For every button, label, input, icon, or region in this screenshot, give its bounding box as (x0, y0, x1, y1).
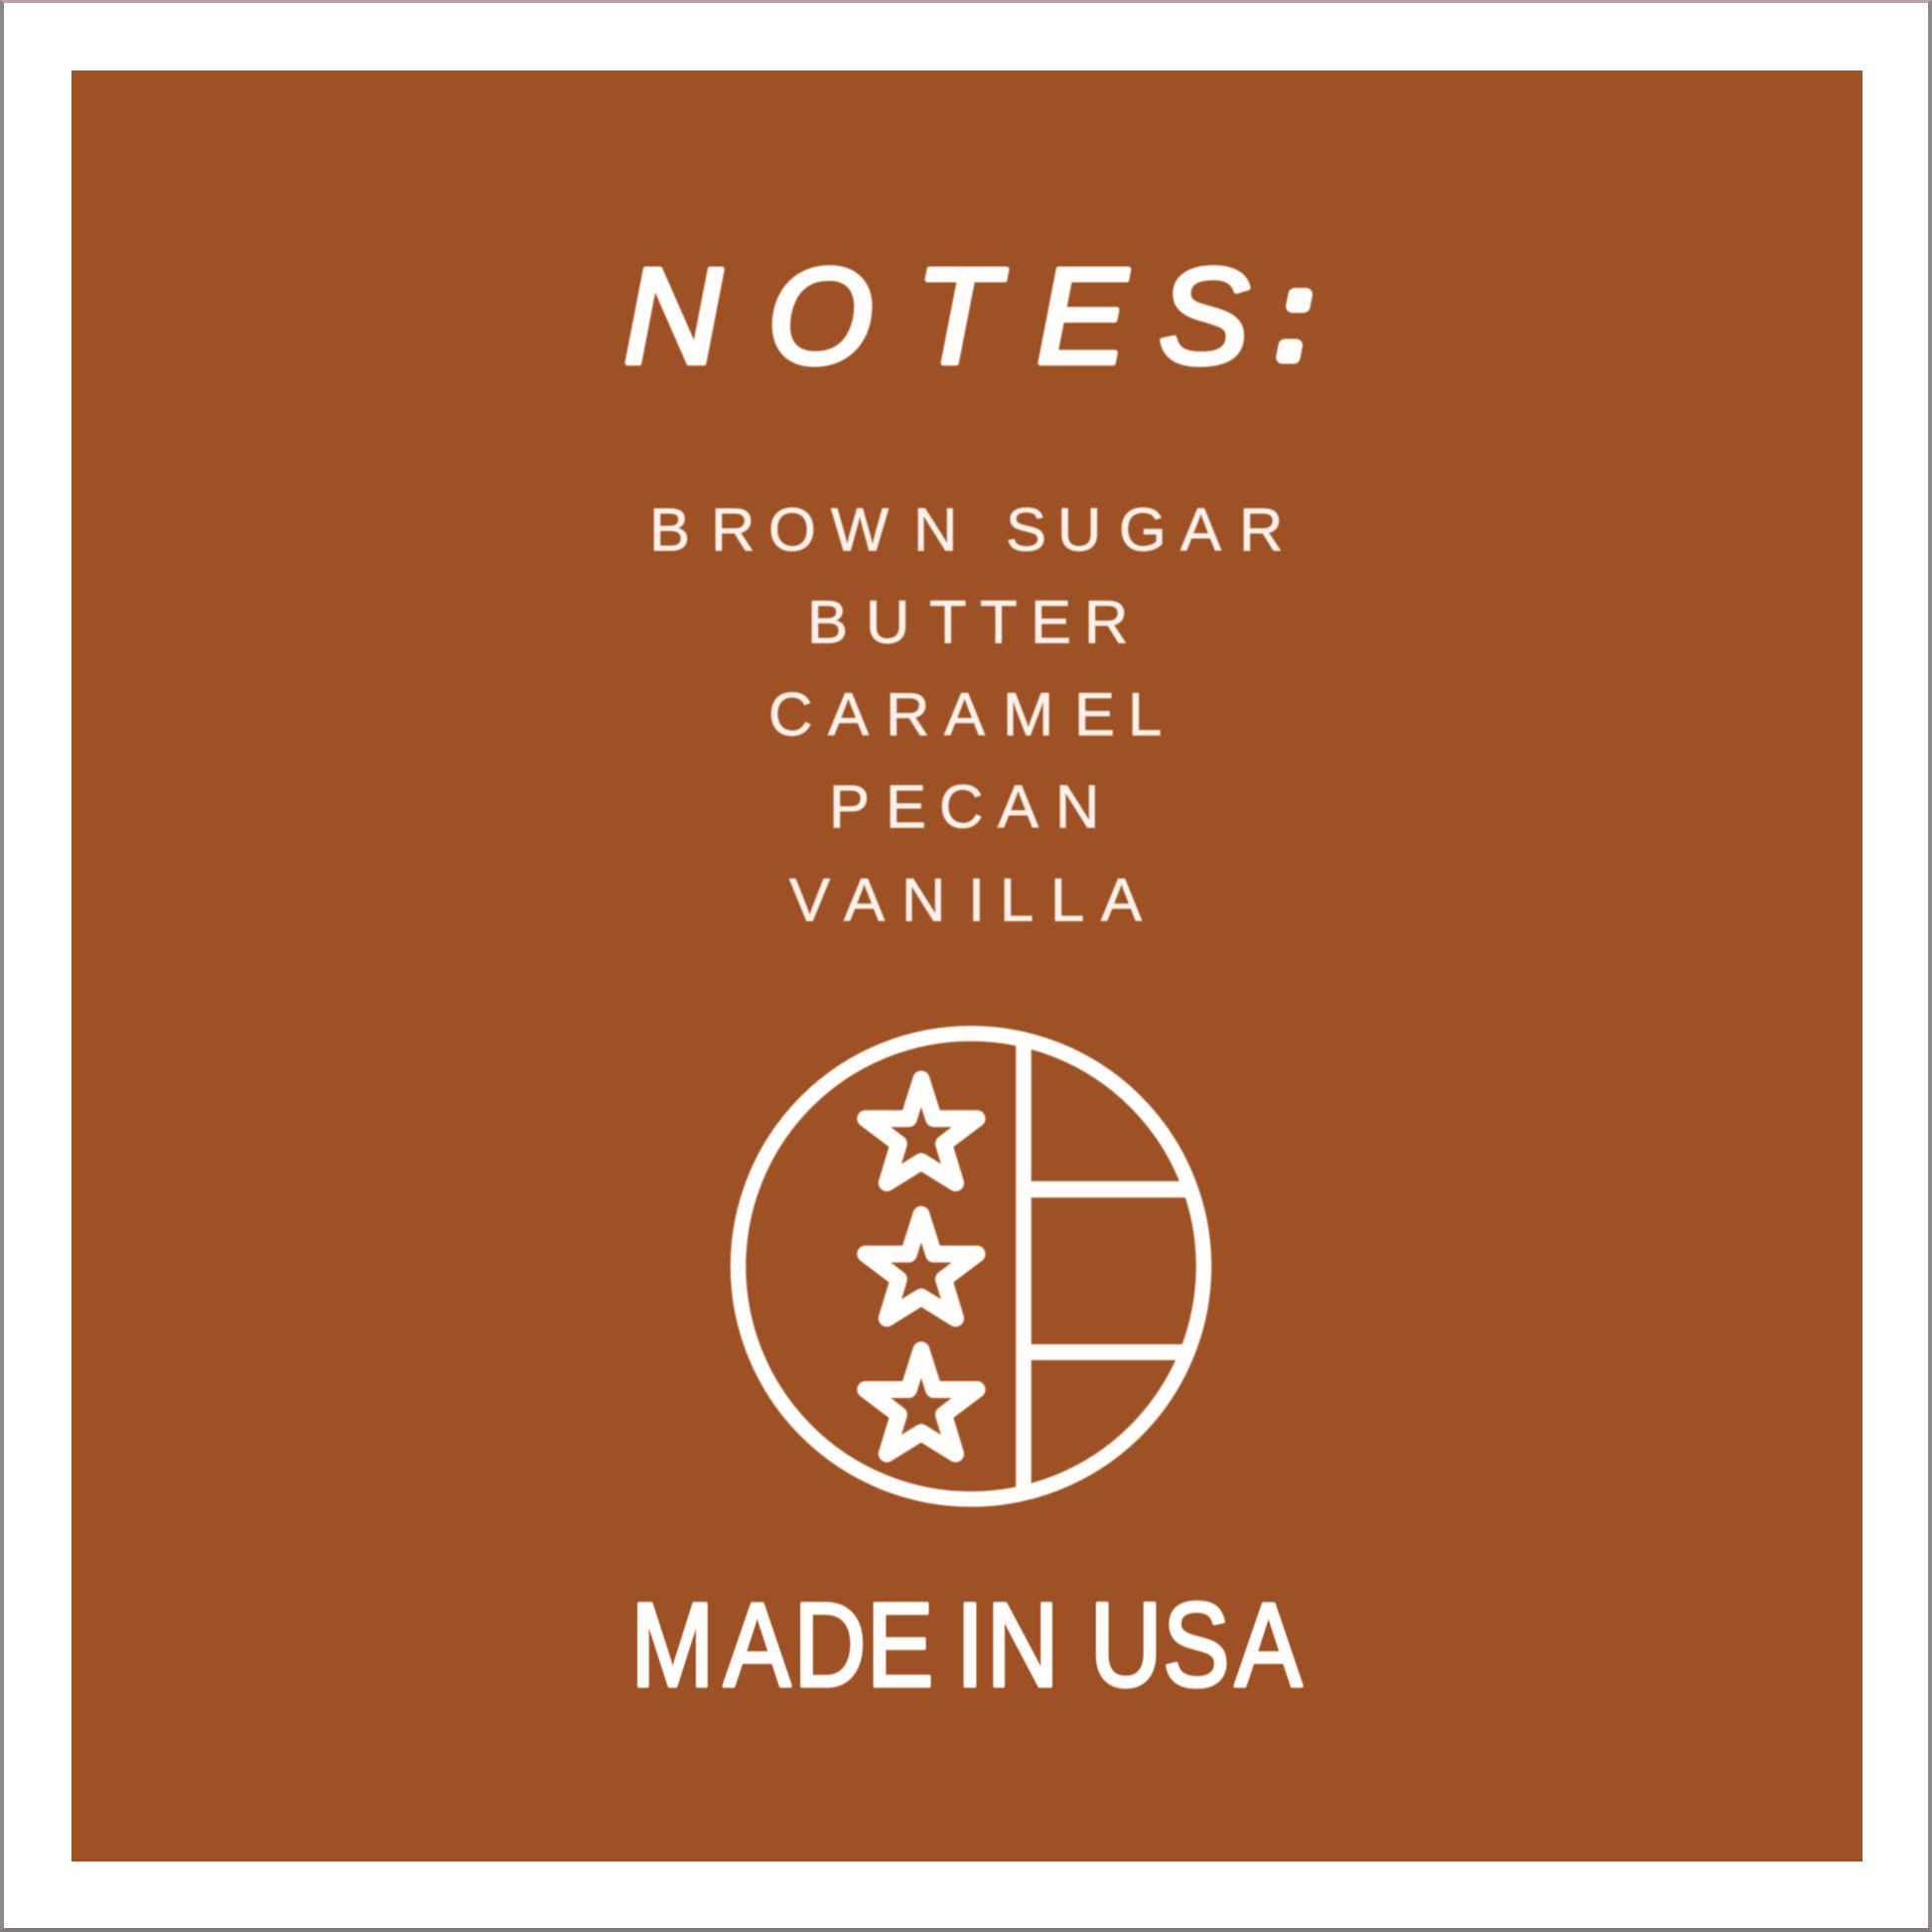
star top (866, 1079, 977, 1183)
flag vertical divider (1016, 1037, 1032, 1495)
star bottom (866, 1350, 977, 1453)
flag upper stripe line (1024, 1181, 1191, 1197)
label: made in USA: MADE IN USA (630, 1580, 1302, 1712)
title: notes: : (1278, 250, 1311, 383)
list of tasting notes (649, 496, 1283, 935)
icon: made in USA flag badge (739, 1034, 1203, 1499)
note: caramel: CARAMEL (768, 681, 1162, 750)
flag lower stripe line (1024, 1344, 1188, 1360)
star middle (866, 1214, 977, 1318)
note: butter: BUTTER (807, 589, 1128, 657)
title: notes: NOTES (623, 240, 1249, 393)
note: vanilla: VANILLA (789, 867, 1142, 935)
note: pecan: PECAN (829, 773, 1099, 842)
note: brown sugar: BROWN SUGAR (649, 496, 1283, 565)
badge circle (739, 1034, 1203, 1499)
